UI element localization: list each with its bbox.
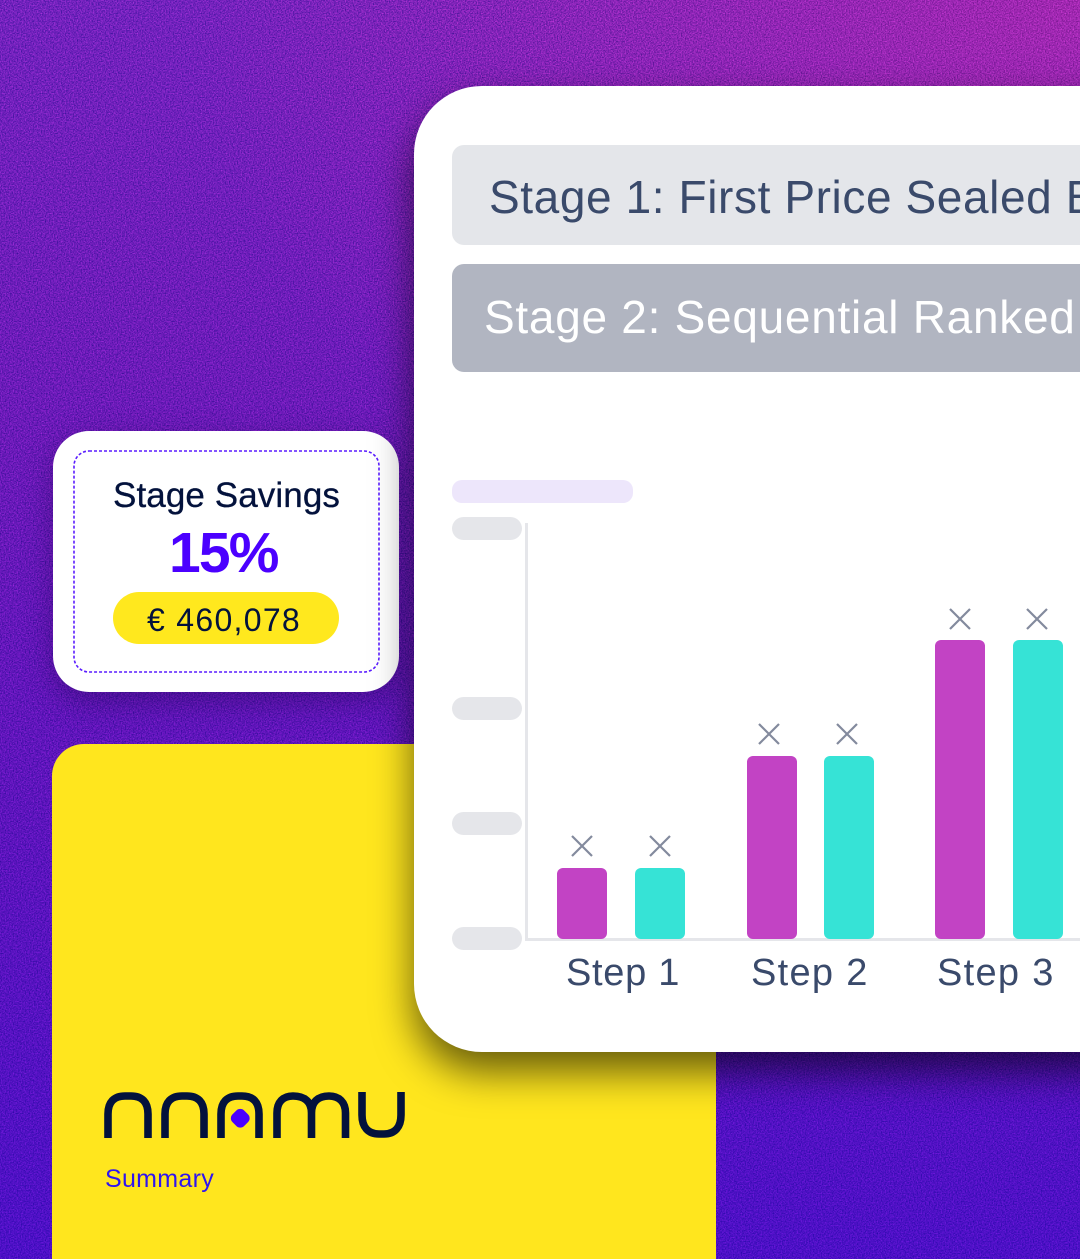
panel: stage savings card bbox=[53, 431, 399, 692]
label: step 3: Step 3 bbox=[937, 952, 1055, 994]
y-axis label placeholder bbox=[452, 697, 522, 720]
icon: x marker bbox=[758, 723, 780, 745]
panel: yellow summary bbox=[52, 744, 716, 1259]
pill: savings amount bbox=[113, 592, 339, 644]
chart axes bbox=[525, 523, 1080, 941]
dashed inner border bbox=[73, 450, 380, 673]
heading: stage savings: Stage Savings bbox=[113, 476, 340, 515]
chart title placeholder bbox=[452, 480, 633, 503]
label: step 2: Step 2 bbox=[751, 952, 869, 994]
panel: main chart card bbox=[414, 86, 1080, 1052]
bar: step 1 teal bbox=[635, 868, 685, 939]
icon: x marker bbox=[949, 608, 971, 630]
icon: x marker bbox=[649, 835, 671, 857]
y-axis label placeholder bbox=[452, 927, 522, 950]
stage 2 bar bbox=[452, 264, 1080, 372]
stage 1 bar bbox=[452, 145, 1080, 245]
bar: step 3 magenta bbox=[935, 640, 985, 939]
bar: step 3 teal bbox=[1013, 640, 1063, 939]
value: savings percent: 15% bbox=[169, 521, 278, 585]
label: step 1: Step 1 bbox=[566, 952, 680, 994]
logo: nnamu bbox=[104, 1092, 405, 1138]
bar: step 2 magenta bbox=[747, 756, 797, 939]
pill: savings amount: € 460,078 bbox=[147, 602, 301, 638]
y-axis label placeholder bbox=[452, 812, 522, 835]
bar: step 2 teal bbox=[824, 756, 874, 939]
stage 2 label: Stage 2: Sequential Ranked bbox=[484, 291, 1076, 343]
bar: step 1 magenta bbox=[557, 868, 607, 939]
icon: x marker bbox=[571, 835, 593, 857]
icon: x marker bbox=[1026, 608, 1048, 630]
text: summary: Summary bbox=[105, 1165, 214, 1193]
y-axis label placeholder bbox=[452, 517, 522, 540]
icon: x marker bbox=[836, 723, 858, 745]
